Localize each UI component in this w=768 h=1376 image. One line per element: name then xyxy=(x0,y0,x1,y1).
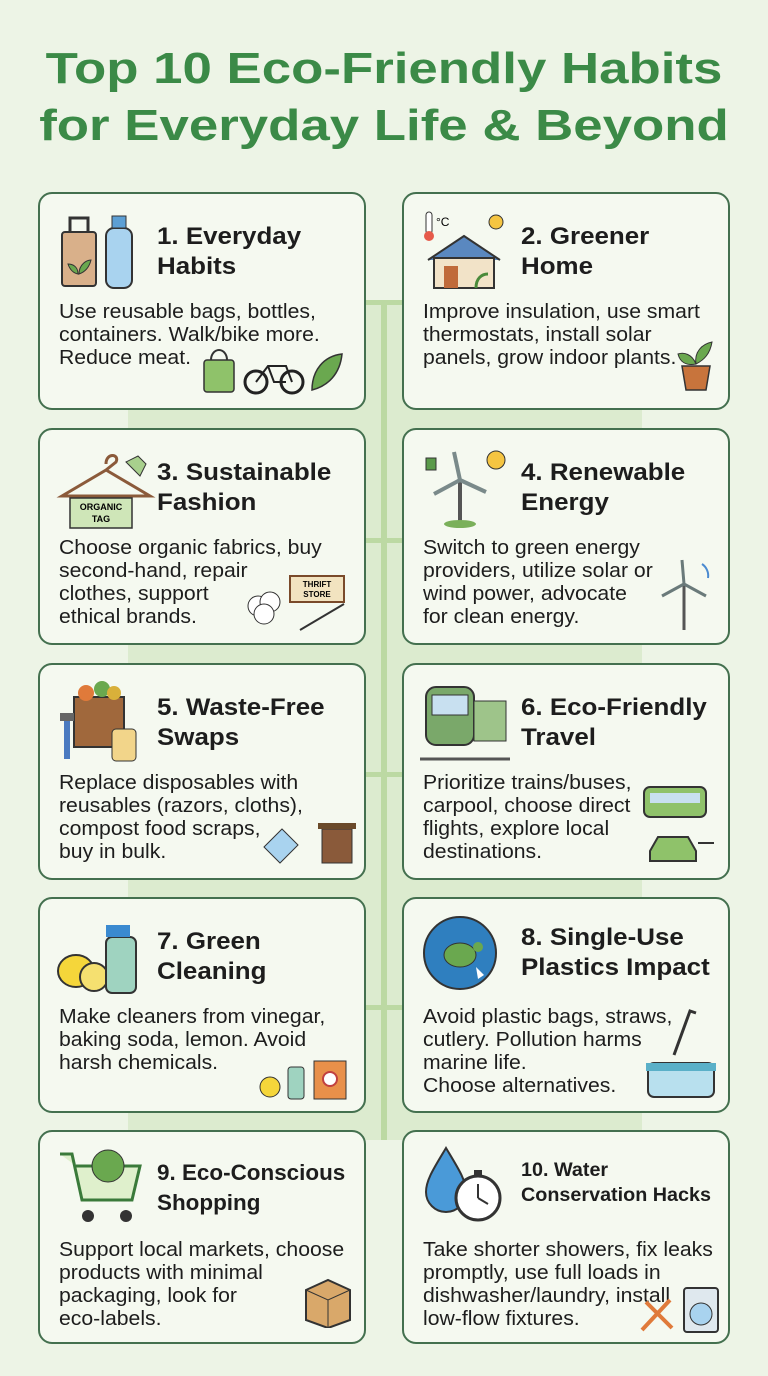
panel: 1 everyday habits xyxy=(38,192,366,410)
icon: hanger with tag xyxy=(56,454,156,529)
heading: 8. Single-Use xyxy=(521,924,684,951)
title: for Everyday Life & Beyond xyxy=(39,101,729,150)
text: providers, utilize solar or xyxy=(423,560,653,582)
icons: bag bike leaf xyxy=(203,349,343,394)
panel: 6 eco-friendly travel xyxy=(402,663,730,880)
heading: Travel xyxy=(521,724,596,751)
icons: bus, car xyxy=(643,786,714,862)
heading xyxy=(521,694,707,751)
text: for clean energy. xyxy=(423,606,579,628)
heading: Conservation Hacks xyxy=(521,1185,711,1206)
heading: 3. Sustainable xyxy=(157,459,331,486)
heading: 1. Everyday xyxy=(157,223,301,250)
heading: 5. Waste-Free xyxy=(157,694,325,721)
panel: 3 sustainable fashion xyxy=(38,428,366,645)
text: marine life. xyxy=(423,1052,527,1074)
icon: lemon and spray bottle xyxy=(57,925,137,994)
text: thermostats, install solar xyxy=(423,324,652,346)
text: buy in bulk. xyxy=(59,841,166,863)
panel: 7 green cleaning xyxy=(38,897,366,1113)
title xyxy=(39,44,729,150)
heading xyxy=(157,223,301,280)
text: containers. Walk/bike more. xyxy=(59,324,320,346)
text: wind power, advocate xyxy=(423,583,627,605)
panel: 4 renewable energy xyxy=(402,428,730,645)
heading xyxy=(157,1160,345,1215)
icons: cotton, thrift store sign: THRIFT xyxy=(303,580,331,589)
text: flights, explore local xyxy=(423,818,609,840)
timeline line xyxy=(381,300,387,1140)
text: Reduce meat. xyxy=(59,347,191,369)
heading: Energy xyxy=(521,489,609,516)
heading xyxy=(157,928,266,985)
text: eco-labels. xyxy=(59,1308,162,1330)
heading: Fashion xyxy=(157,489,256,516)
heading: Swaps xyxy=(157,724,239,751)
icons: cotton, thrift store sign xyxy=(248,575,345,631)
heading: Shopping xyxy=(157,1190,260,1215)
background band xyxy=(128,300,642,1140)
text: promptly, use full loads in xyxy=(423,1262,661,1284)
text: products with minimal xyxy=(59,1262,263,1284)
heading xyxy=(521,223,649,280)
text: Avoid plastic bags, straws, xyxy=(423,1006,672,1028)
text: destinations. xyxy=(423,841,542,863)
text xyxy=(423,772,632,863)
text: Use reusable bags, bottles, xyxy=(59,301,316,323)
text: Make cleaners from vinegar, xyxy=(59,1006,325,1028)
text: panels, grow indoor plants. xyxy=(423,347,676,369)
icon: plant pot xyxy=(677,341,713,391)
icon: hanger with tag: TAG xyxy=(92,514,110,524)
text: carpool, choose direct xyxy=(423,795,630,817)
heading: 2. Greener xyxy=(521,223,649,250)
text: Choose alternatives. xyxy=(423,1075,616,1097)
heading: 4. Renewable xyxy=(521,459,685,486)
text: packaging, look for xyxy=(59,1285,237,1307)
panel: 10 water conservation xyxy=(402,1130,730,1344)
heading: Cleaning xyxy=(157,958,266,985)
text: baking soda, lemon. Avoid xyxy=(59,1029,306,1051)
icons: straw, container xyxy=(646,1009,716,1098)
icon: wind turbine xyxy=(661,560,710,630)
heading xyxy=(157,459,331,516)
text: clothes, support xyxy=(59,583,209,605)
heading: Habits xyxy=(157,253,236,280)
icon: train xyxy=(420,686,510,760)
text: Replace disposables with xyxy=(59,772,298,794)
text xyxy=(59,301,320,369)
icon: bag and bottle xyxy=(61,216,133,289)
icons: tools, washing machine xyxy=(638,1280,722,1336)
text xyxy=(59,772,303,863)
text xyxy=(59,1006,325,1074)
panel: 9 eco-conscious shopping xyxy=(38,1130,366,1344)
text: Support local markets, choose xyxy=(59,1239,344,1261)
text: Switch to green energy xyxy=(423,537,640,559)
text: Prioritize trains/buses, xyxy=(423,772,632,794)
text: harsh chemicals. xyxy=(59,1052,218,1074)
title: Top 10 Eco-Friendly Habits xyxy=(46,44,722,93)
icon: cardboard box xyxy=(305,1278,351,1328)
icon: house solar: °C xyxy=(436,215,450,229)
text xyxy=(59,1239,344,1330)
heading: Home xyxy=(521,253,593,280)
icon: shopping cart leaf xyxy=(60,1150,142,1222)
panel: 8 single-use plastics xyxy=(402,897,730,1113)
heading: 7. Green xyxy=(157,928,261,955)
icon: compost bin razor jar xyxy=(60,681,136,762)
text xyxy=(423,1239,713,1330)
text xyxy=(423,1006,672,1097)
heading: 6. Eco-Friendly xyxy=(521,694,707,721)
icon: hanger with tag: ORGANIC xyxy=(80,502,123,512)
text: compost food scraps, xyxy=(59,818,260,840)
text: low-flow fixtures. xyxy=(423,1308,580,1330)
text xyxy=(423,301,700,369)
heading xyxy=(157,694,325,751)
icons: cotton, thrift store sign: STORE xyxy=(303,590,331,599)
icon: ocean turtle xyxy=(423,916,497,990)
icons: lemon spray box xyxy=(260,1060,346,1100)
text: dishwasher/laundry, install xyxy=(423,1285,670,1307)
text: second-hand, repair xyxy=(59,560,248,582)
heading: Plastics Impact xyxy=(521,954,710,981)
heading xyxy=(521,924,710,981)
icon: wind turbine sun plug xyxy=(426,450,506,528)
text: Choose organic fabrics, buy xyxy=(59,537,322,559)
icon: house solar xyxy=(424,212,504,289)
text xyxy=(423,537,653,628)
icon: water drop and stopwatch xyxy=(425,1146,502,1222)
text: Improve insulation, use smart xyxy=(423,301,700,323)
text: reusables (razors, cloths), xyxy=(59,795,303,817)
text: Take shorter showers, fix leaks xyxy=(423,1239,713,1261)
heading xyxy=(521,1160,711,1206)
icons: cloth, bin xyxy=(263,823,356,864)
text xyxy=(59,537,322,628)
heading: 10. Water xyxy=(521,1160,608,1181)
text: ethical brands. xyxy=(59,606,197,628)
panel: 2 greener home xyxy=(402,192,730,410)
panel: 5 waste-free swaps xyxy=(38,663,366,880)
heading: 9. Eco-Conscious xyxy=(157,1160,345,1185)
heading xyxy=(521,459,685,516)
text: cutlery. Pollution harms xyxy=(423,1029,642,1051)
